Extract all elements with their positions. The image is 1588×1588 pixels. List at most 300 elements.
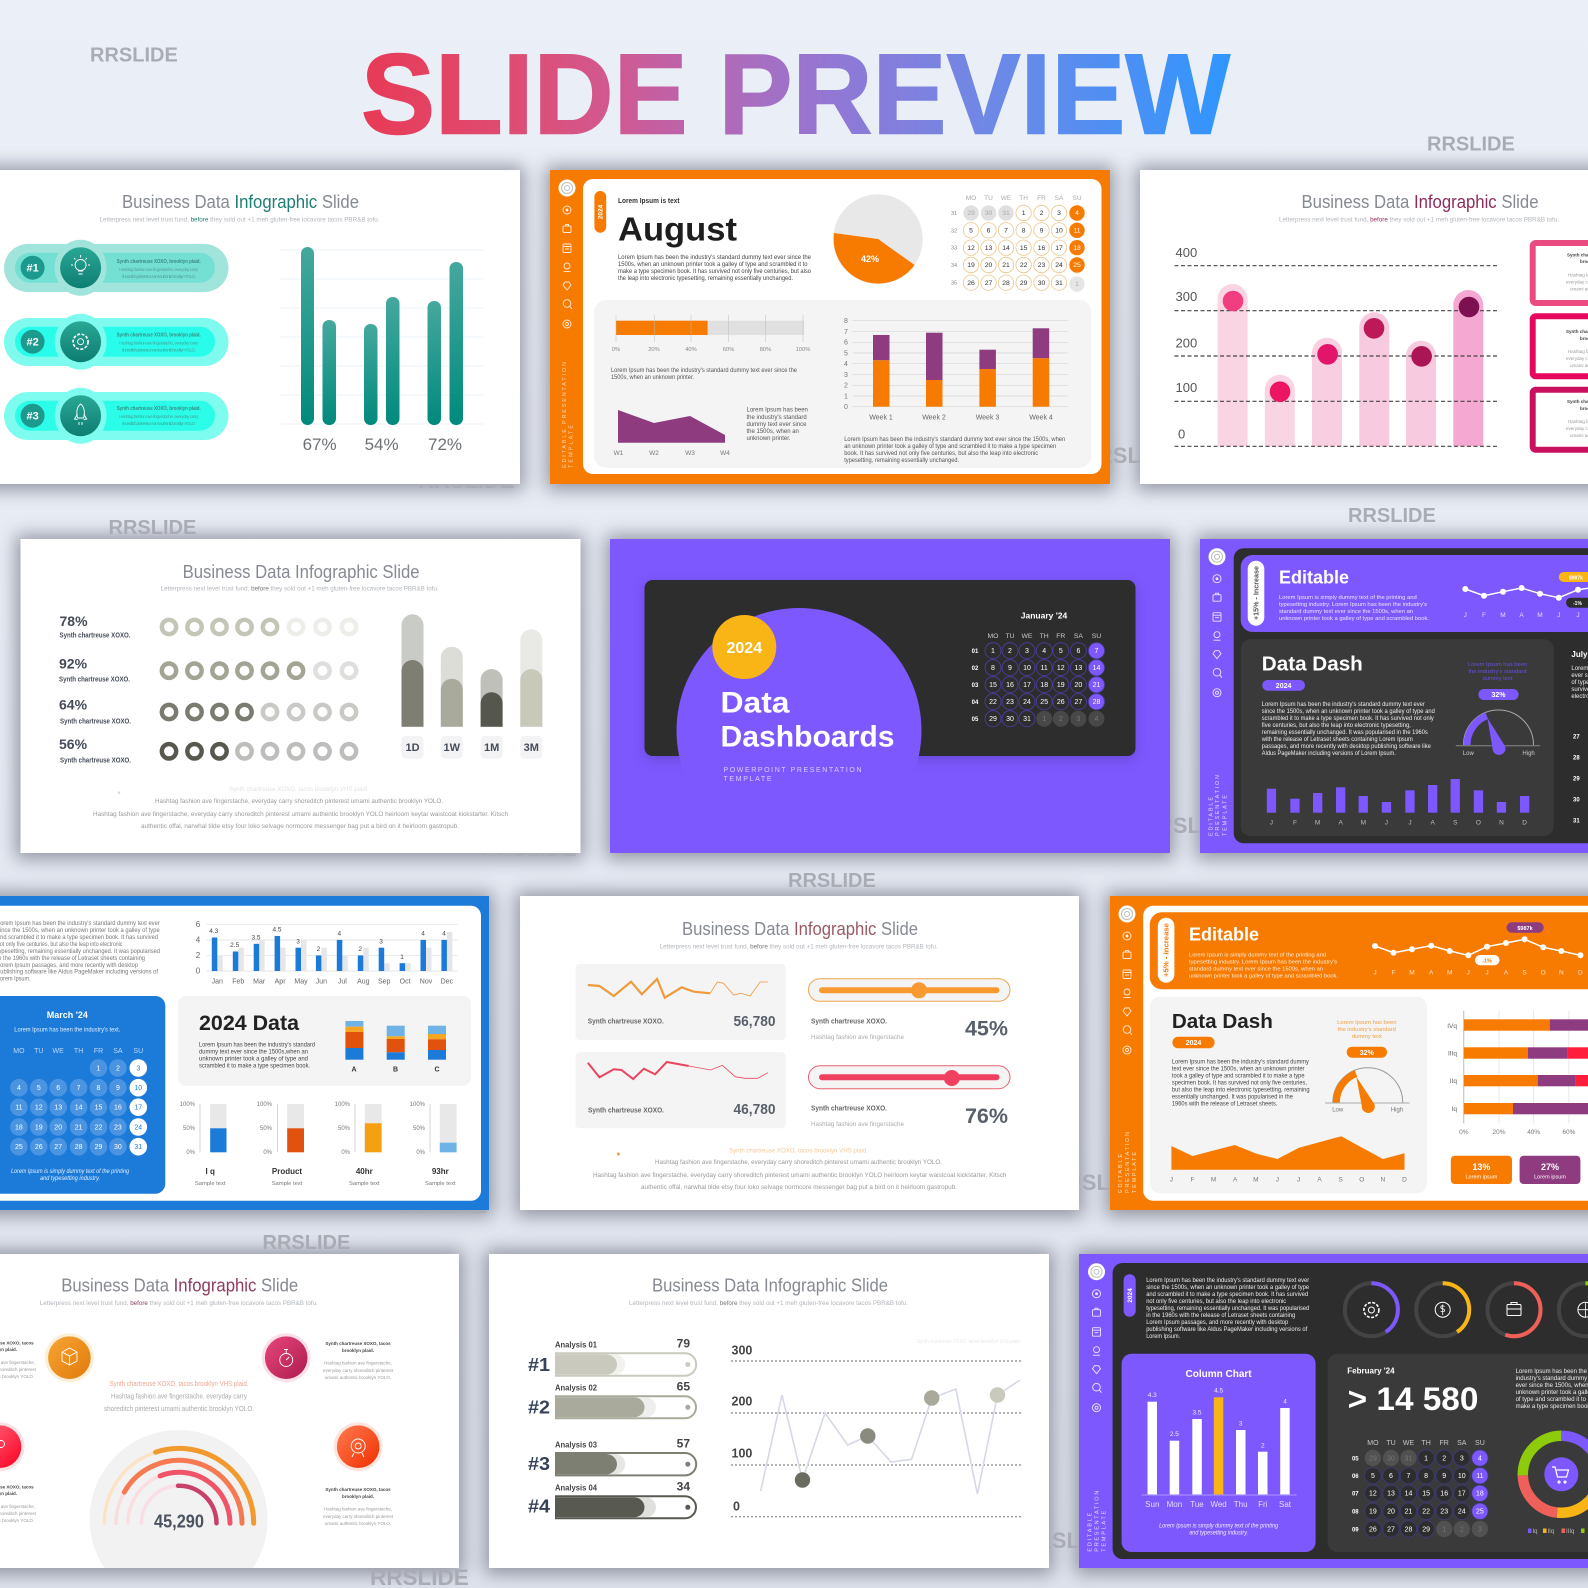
calendar: 08 — [1352, 1510, 1359, 1516]
paragraph: and scrambled it to make a type specimen book. It has survived — [1146, 1292, 1308, 1298]
card paragraph: remaining essentially unchanged. It was popularised in the 1960s — [1262, 730, 1428, 736]
calendar: 6 — [1076, 648, 1080, 655]
slider 1: Hashtag fashion ave fingerstache — [811, 1034, 904, 1041]
calendar: 20 — [985, 262, 992, 269]
four gauge bars: 50% — [338, 1126, 351, 1132]
calendar: 27 — [1387, 1526, 1395, 1533]
calendar: 1 — [991, 648, 995, 655]
center text: Synth chartreuse XOXO, tacos brooklyn VHS plaid. — [110, 1379, 248, 1388]
calendar: 06 — [1352, 1474, 1359, 1480]
gauge: Low — [1463, 751, 1474, 757]
area caption: dummy text ever since — [746, 422, 807, 428]
watermarks: RRSLIDE — [480, 836, 577, 861]
analysis 1: Analysis 01 — [555, 1341, 598, 1350]
percent labels: Synth chartreuse XOXO. — [60, 633, 131, 640]
area chart: W4 — [720, 450, 730, 457]
calendar: 22 — [1020, 262, 1028, 269]
calendar: 29 — [1422, 1526, 1430, 1533]
gauge: High — [1522, 751, 1535, 757]
axis labels: 400 — [1176, 245, 1197, 260]
card paragraph: specimen book. It has survived not only five centuries, — [1172, 1080, 1307, 1086]
blue calendar card: 7 — [77, 1085, 81, 1092]
clustered column chart: 4.3 — [209, 928, 219, 935]
four gauge bars: 100% — [180, 1102, 196, 1108]
blue calendar card: 15 — [95, 1105, 102, 1112]
area caption: the 1500s, when an — [746, 429, 799, 435]
banner paragraph — [1189, 952, 1338, 980]
analysis 3 — [528, 1436, 696, 1475]
chart caption — [844, 437, 1065, 464]
blue calendar card: 16 — [114, 1105, 122, 1112]
2024 Data card: Lorem Ipsum has been the industry's standard — [199, 1042, 315, 1048]
calendar: 12 — [967, 245, 975, 252]
side text blocks: umami authentic brooklyn YOLO. — [325, 1521, 391, 1526]
dark card — [644, 580, 1136, 756]
calendar: 28 — [1093, 699, 1100, 706]
chart caption: an unknown printer took a galley of type and scrambled it to make a type specimen — [844, 444, 1056, 450]
calendar: 34 — [951, 263, 957, 269]
calendar: 1 — [1442, 1526, 1446, 1533]
side cards — [1533, 243, 1588, 450]
calendar: 27 — [985, 280, 992, 287]
watermarks: RRSLIDE — [1427, 134, 1515, 156]
horizontal stacked bar chart: 0% — [1459, 1129, 1469, 1136]
column chart card: 4 — [1283, 1399, 1287, 1406]
calendar: 4 — [1042, 648, 1046, 655]
calendar: 19 — [967, 262, 975, 269]
gauge note — [1337, 1020, 1396, 1040]
panel: purple Data Dash slide: Data Dash — [1262, 654, 1363, 676]
big number: > 14 580 — [1348, 1381, 1478, 1417]
blue calendar card: 5 — [37, 1085, 41, 1092]
progress caption — [611, 368, 798, 381]
calendar: 07 — [1352, 1492, 1359, 1498]
panel: orange Data Dash slide: +5% - Increase — [1164, 923, 1170, 977]
horizontal stacked bar chart: 40% — [1527, 1129, 1540, 1136]
analysis 2: #2 — [528, 1397, 550, 1417]
calendar: 03 — [972, 683, 979, 689]
calendar: 26 — [1369, 1526, 1377, 1533]
line chart: $987k — [1517, 926, 1534, 932]
column chart card: 2 — [1261, 1443, 1265, 1450]
icon: stopwatch — [262, 1333, 311, 1382]
year pill — [594, 191, 606, 233]
calendar: WE — [1403, 1440, 1414, 1447]
calendar: 3 — [1460, 1455, 1464, 1462]
banner paragraph: Lorem Ipsum is simply dummy text of the printing and — [1279, 595, 1417, 601]
axis labels: 300 — [1176, 289, 1197, 304]
progress caption: Lorem Ipsum has been the industry's standard dummy text ever since the — [611, 368, 798, 374]
paragraph: in the 1960s with the release of Letraset sheets containing — [0, 956, 145, 962]
lollipop dots — [1223, 291, 1479, 402]
axis labels: 0 — [1178, 427, 1185, 442]
area chart: W3 — [685, 450, 695, 457]
area chart — [1170, 1136, 1407, 1184]
paragraph: since the 1500s, when an unknown printer took a galley of type — [1146, 1285, 1310, 1291]
rainbow arcs — [104, 1448, 254, 1523]
clustered column chart: 6 — [196, 920, 201, 929]
percent labels: 78% — [60, 613, 88, 629]
paragraph — [618, 255, 812, 282]
area chart: W2 — [649, 450, 659, 457]
line chart: 200 — [732, 1395, 752, 1409]
calendar: 23 — [1038, 262, 1045, 269]
panel: purple Data Dash slide: +15% - Increase — [1254, 566, 1260, 620]
stacked bar chart: Week 3 — [976, 414, 999, 422]
area chart: F — [1191, 1176, 1195, 1184]
bar chart labels: 54% — [365, 435, 399, 454]
area chart: J — [1276, 1176, 1279, 1184]
column chart card: Sat — [1279, 1500, 1292, 1509]
panel: analysis bars and line slide — [489, 1254, 1049, 1568]
paragraph: not only five centuries, but also the leap into electronic — [1146, 1299, 1286, 1305]
paragraph: typesetting, remaining essentially unchanged. It was popularised — [1146, 1306, 1309, 1312]
2024 Data card: scrambled it to make a type specimen book. — [199, 1064, 310, 1070]
four gauge bars: 93hr — [432, 1167, 449, 1176]
panel: purple Data Dash slide: 2024 — [1276, 683, 1291, 690]
vertical label: PRESENTATION — [1215, 775, 1221, 836]
watermarks: RRSLIDE — [390, 1193, 487, 1218]
banner paragraph: standard dummy text ever since the 1500s, when an — [1279, 609, 1413, 615]
blue calendar card — [0, 996, 165, 1194]
panel: orange Data Dash slide: 2024 — [1186, 1040, 1201, 1047]
sparkline card 2: Synth chartreuse XOXO. — [588, 1105, 664, 1114]
four gauge bars: Sample text — [272, 1181, 303, 1187]
area chart — [614, 410, 730, 457]
calendar: 27 — [1075, 699, 1082, 706]
pill 1: shoreditch pinterest umami authentic brooklyn YOLO. — [122, 274, 196, 279]
pie chart — [833, 194, 923, 284]
calendar: 31 — [1405, 1455, 1412, 1462]
sidebar icons — [1088, 1263, 1105, 1412]
column chart card: and typesetting industry. — [1189, 1530, 1248, 1536]
2024 Data card: dummy text ever since the 1500s,when an — [199, 1050, 308, 1056]
subheading: Letterpress next level trust fund, before they sold out +1 meh gluten-free locavore tacos PBR&B tofu. — [1279, 216, 1559, 224]
line chart: N — [1559, 970, 1564, 976]
gauge: 32% — [1491, 692, 1506, 699]
line chart: J — [1576, 612, 1580, 619]
monthly bars: N — [1499, 820, 1504, 826]
calendar: FR — [1037, 195, 1046, 202]
stacked bar chart — [844, 318, 1068, 422]
calendar: 30 — [1006, 716, 1014, 723]
monthly bars: S — [1453, 820, 1458, 826]
subheading: Letterpress next level trust fund, before they sold out +1 meh gluten-free locavore tacos PBR&B tofu. — [629, 1300, 908, 1307]
chart caption: Lorem Ipsum has been the industry's standard dummy text ever since the 1500s, when — [844, 437, 1065, 443]
side text blocks: Hashtag fashion ave fingerstache, — [324, 1360, 392, 1366]
blue calendar card: Lorem Ipsum has been the industry's text. — [14, 1028, 121, 1034]
paragraph: publishing software like Aldus PageMaker including versions of — [1146, 1327, 1308, 1333]
calendar: 29 — [1369, 1455, 1377, 1462]
blue calendar card: 1 — [97, 1065, 101, 1072]
pill 3: Synth chartreuse XOXO, brooklyn plaid. — [117, 406, 201, 412]
top banner — [1241, 555, 1588, 632]
four gauge bars: 50% — [413, 1126, 426, 1132]
calendar: 1 — [1022, 210, 1026, 217]
July column: 30 — [1573, 798, 1580, 804]
July column: 31 — [1573, 818, 1580, 824]
watermarks: RRSLIDE — [788, 870, 876, 892]
card paragraph: took a galley of type and scrambled it to make a type — [1172, 1073, 1305, 1079]
calendar: TH — [1421, 1440, 1431, 1447]
clustered column chart: 4 — [442, 930, 446, 937]
February card — [1328, 1354, 1588, 1552]
column chart card — [1122, 1354, 1316, 1552]
cover title: Dashboards — [720, 721, 894, 754]
watermarks: RRSLIDE — [1020, 1528, 1117, 1553]
clustered column chart: Aug — [357, 978, 370, 986]
calendar: SU — [1072, 195, 1082, 202]
blue calendar card: 24 — [134, 1124, 142, 1131]
line chart: 0 — [733, 1500, 740, 1514]
calendar: 26 — [967, 280, 975, 287]
legend: IIIq — [1566, 1529, 1574, 1535]
calendar: 8 — [1424, 1473, 1428, 1480]
stacked bar chart: Week 4 — [1029, 414, 1053, 422]
calendar: 35 — [951, 281, 957, 287]
blue calendar card: 29 — [95, 1144, 102, 1151]
clustered column chart: 1 — [400, 954, 404, 961]
four gauge bars: 0% — [263, 1150, 273, 1156]
clustered column chart: 0 — [196, 966, 201, 976]
monthly bars: A — [1431, 820, 1436, 826]
calendar: TU — [1386, 1440, 1396, 1447]
watermarks: RRSLIDE — [108, 517, 196, 539]
stacked bar chart: 6 — [844, 340, 848, 346]
card paragraph: but also the leap into electronic typesetting, remaining — [1172, 1087, 1310, 1093]
panel: dark dashboard slide — [1079, 1254, 1588, 1568]
four gauge bars: I q — [206, 1167, 215, 1176]
area chart: M — [1211, 1176, 1216, 1184]
footer text: Hashtag fashion ave fingerstache, everyday carry shoreditch pinterest umami authentic brooklyn YOLO heirloom keytar waistcoat kickstarter. Kitsch — [593, 1172, 1007, 1179]
paragraph: Lorem Ipsum has been the industry's standard dummy text ever — [1146, 1278, 1309, 1284]
footer text: Hashtag fashion ave fingerstache, everyday carry shoreditch pinterest umami authentic brooklyn YOLO heirloom keytar waistcoat kickstarter. Kitsch — [93, 811, 508, 818]
calendar: 9 — [1040, 228, 1044, 234]
legend: IIq — [1548, 1529, 1554, 1535]
bar tags — [402, 736, 542, 759]
stacked bar chart: 3 — [844, 372, 848, 379]
paragraph — [1146, 1278, 1310, 1340]
heading: Business Data Infographic Slide — [61, 1276, 298, 1296]
calendar: 21 — [1093, 682, 1100, 689]
year badge — [712, 615, 776, 679]
calendar: 14 — [1093, 665, 1100, 672]
calendar: TU — [1005, 633, 1015, 640]
calendar — [951, 195, 1085, 292]
line chart: 100 — [732, 1446, 752, 1460]
calendar: 19 — [1057, 682, 1065, 689]
column chart card: 4.5 — [1214, 1388, 1223, 1395]
blue calendar card: 4 — [17, 1085, 21, 1092]
sparkline card 2: 46,780 — [734, 1101, 776, 1118]
side text blocks: Hashtag fashion ave fingerstache, — [324, 1506, 392, 1512]
vertical label: TEMPLATE — [1222, 795, 1228, 836]
side text blocks: brooklyn plaid. — [342, 1348, 374, 1353]
paragraph: Lorem Ipsum passages, and more recently with desktop — [0, 963, 139, 969]
analysis 4: 34 — [677, 1479, 690, 1493]
legend — [1528, 1528, 1584, 1535]
side paragraph: of type and scrambled it to — [1516, 1397, 1587, 1403]
four gauge bars: Product — [272, 1167, 302, 1176]
chart caption: typesetting, remaining essentially unchanged. — [844, 458, 960, 464]
purple dome — [676, 608, 922, 853]
percent labels: 64% — [59, 696, 88, 712]
panel: gray rings slide — [20, 539, 580, 853]
stacked bar chart: Week 1 — [869, 414, 893, 422]
calendar: 14 — [1002, 245, 1010, 252]
blue calendar card: 11 — [15, 1105, 23, 1112]
calendar: WE — [1001, 195, 1012, 202]
blue calendar card: 26 — [35, 1144, 43, 1151]
stacked bar chart: 7 — [844, 329, 848, 336]
calendar: 16 — [1006, 682, 1014, 689]
percent labels: 56% — [59, 736, 88, 752]
side text blocks: Synth chartreuse XOXO, tacos — [325, 1341, 391, 1346]
pill 1: #1 — [26, 262, 39, 274]
panel: August dashboard slide — [550, 170, 1110, 484]
four gauge bars: 40hr — [356, 1167, 373, 1176]
card paragraph: with the release of Letraset sheets containing Lorem Ipsum — [1261, 737, 1413, 743]
stat cards: Lorem ipsum — [1534, 1174, 1566, 1180]
blue calendar card: 12 — [35, 1105, 43, 1112]
area chart: S — [1339, 1176, 1344, 1184]
subheading: Letterpress next level trust fund, before they sold out +1 meh gluten-free locavore tacos PBR&B tofu. — [660, 943, 938, 950]
slider 2: 76% — [965, 1104, 1008, 1128]
card paragraph: since the 1500s, when an unknown printer took a galley of type and — [1262, 709, 1435, 715]
line chart: M — [1409, 970, 1415, 976]
calendar: MO — [966, 195, 976, 202]
percent labels: Synth chartreuse XOXO. — [60, 757, 131, 764]
banner paragraph: standard dummy text ever since the 1500s, when an — [1189, 966, 1323, 972]
line chart: -1% — [1482, 958, 1492, 964]
bar chart labels: 67% — [303, 435, 337, 454]
percent labels: Synth chartreuse XOXO. — [59, 676, 130, 683]
blue calendar card: SA — [113, 1048, 123, 1055]
analysis 1: 79 — [677, 1337, 690, 1351]
vertical label — [562, 362, 574, 468]
paragraph: publishing software like Aldus PageMaker including versions of — [0, 970, 158, 976]
vertical label: EDITABLE — [1088, 1512, 1094, 1552]
title: SLIDE PREVIEW — [361, 32, 1230, 158]
progress bar — [612, 315, 810, 353]
blue calendar card: 19 — [35, 1124, 43, 1131]
analysis 3: #3 — [528, 1454, 550, 1474]
pill 1: Synth chartreuse XOXO, brooklyn plaid. — [117, 259, 201, 265]
calendar: TH — [1040, 633, 1049, 640]
column chart card: 3.5 — [1192, 1410, 1202, 1417]
calendar: 7 — [1004, 228, 1008, 234]
monthly bars: J — [1270, 820, 1273, 826]
stacked bar chart: 1 — [844, 394, 848, 400]
calendar: 10 — [1023, 665, 1031, 672]
watermarks: RRSLIDE — [1348, 505, 1436, 527]
year pill — [1172, 1037, 1215, 1048]
area chart: D — [1402, 1176, 1407, 1184]
donut icons — [1345, 1283, 1588, 1336]
calendar: TU — [984, 195, 993, 202]
calendar: 13 — [1387, 1491, 1395, 1498]
clustered column chart: 4 — [421, 930, 425, 937]
card paragraph: Lorem Ipsum has been the industry's standard dummy text ever — [1262, 702, 1425, 708]
pill 3: Hashtag fashion ave fingerstache, everyday carry — [119, 414, 199, 419]
subheading: Letterpress next level trust fund, before they sold out +1 meh gluten-free locavore tacos PBR&B tofu. — [100, 216, 380, 224]
July column — [1571, 650, 1588, 824]
calendar: 19 — [1369, 1509, 1377, 1516]
calendar: 16 — [1440, 1491, 1448, 1498]
monthly bars: O — [1476, 820, 1481, 826]
card paragraph: text ever since the 1500s, when an unknown printer — [1172, 1066, 1304, 1072]
paragraph: in the 1960s with the release of Letraset sheets containing — [1146, 1313, 1295, 1319]
panel: teal pills and bar chart slide — [0, 170, 520, 484]
calendar: 32 — [951, 228, 957, 234]
banner paragraph: unknown printer took a galley of type and scrambled book. — [1279, 616, 1429, 622]
column chart card: 2.5 — [1170, 1431, 1179, 1438]
clustered column chart: Jul — [338, 978, 347, 986]
bar tags: 1D — [405, 742, 420, 754]
horizontal stacked bar chart: IIq — [1450, 1078, 1457, 1085]
four gauge bars — [180, 1102, 457, 1187]
Data Dash card — [1241, 639, 1554, 836]
blue calendar card: 31 — [134, 1144, 142, 1151]
bar chart labels: 72% — [428, 435, 462, 454]
vertical label — [1208, 775, 1228, 836]
pill 1: Hashtag fashion ave fingerstache, everyday carry — [119, 267, 199, 272]
vertical label: EDITABLE — [1208, 797, 1214, 836]
blue calendar card: 23 — [114, 1124, 122, 1131]
calendar: 21 — [1405, 1509, 1412, 1516]
center text: Hashtag fashion ave fingerstache, everyday carry — [111, 1392, 247, 1400]
gauge note: dummy text — [1483, 676, 1513, 682]
line chart: M — [1447, 970, 1452, 976]
blue calendar card: March '24 — [47, 1010, 88, 1020]
cover subtitle — [724, 767, 862, 783]
footer text: Hashtag fashion ave fingerstache, everyday carry shoreditch pinterest umami authentic brooklyn YOLO. — [655, 1159, 942, 1166]
calendar: 1 — [1424, 1455, 1428, 1462]
pill 1 — [4, 240, 228, 296]
blue calendar card: 21 — [75, 1124, 83, 1131]
stat cards: Lorem ipsum — [1466, 1174, 1498, 1180]
blue calendar card: 9 — [116, 1085, 120, 1092]
stacked bar chart: Week 2 — [922, 414, 946, 422]
calendar: 14 — [1405, 1491, 1412, 1498]
blue calendar card: TH — [74, 1048, 83, 1055]
calendar: 33 — [951, 246, 957, 252]
line chart — [1372, 922, 1583, 976]
calendar: 2 — [1460, 1526, 1464, 1533]
four gauge bars: 0% — [416, 1150, 426, 1156]
dark panel — [1234, 548, 1588, 843]
slider 2: Hashtag fashion ave fingerstache — [811, 1121, 904, 1128]
blue calendar card: Lorem Ipsum is simply dummy text of the printing — [11, 1169, 130, 1175]
line chart: F — [1482, 612, 1486, 619]
analysis 4: Analysis 04 — [555, 1483, 598, 1492]
line chart: J — [1557, 612, 1560, 619]
analysis 4 — [528, 1479, 696, 1518]
subheading: Letterpress next level trust fund, before they sold out +1 meh gluten-free locavore tacos PBR&B tofu. — [161, 586, 439, 592]
paragraph: Lorem Ipsum has been the industry's standard dummy text ever since the — [618, 255, 812, 261]
watermarks: RRSLIDE — [1141, 813, 1238, 838]
calendar: 30 — [985, 210, 992, 217]
four gauge bars: Sample text — [425, 1181, 456, 1187]
gauge value: 45,290 — [154, 1511, 204, 1531]
area caption: unknown printer. — [746, 436, 791, 442]
analysis 3: 57 — [677, 1436, 690, 1450]
blue calendar card: MO — [13, 1048, 25, 1055]
area chart: A — [1233, 1176, 1238, 1184]
column chart card: Thu — [1234, 1500, 1248, 1509]
card paragraph — [1172, 1059, 1310, 1107]
side paragraph: Lorem Ipsum has been the — [1516, 1369, 1588, 1375]
